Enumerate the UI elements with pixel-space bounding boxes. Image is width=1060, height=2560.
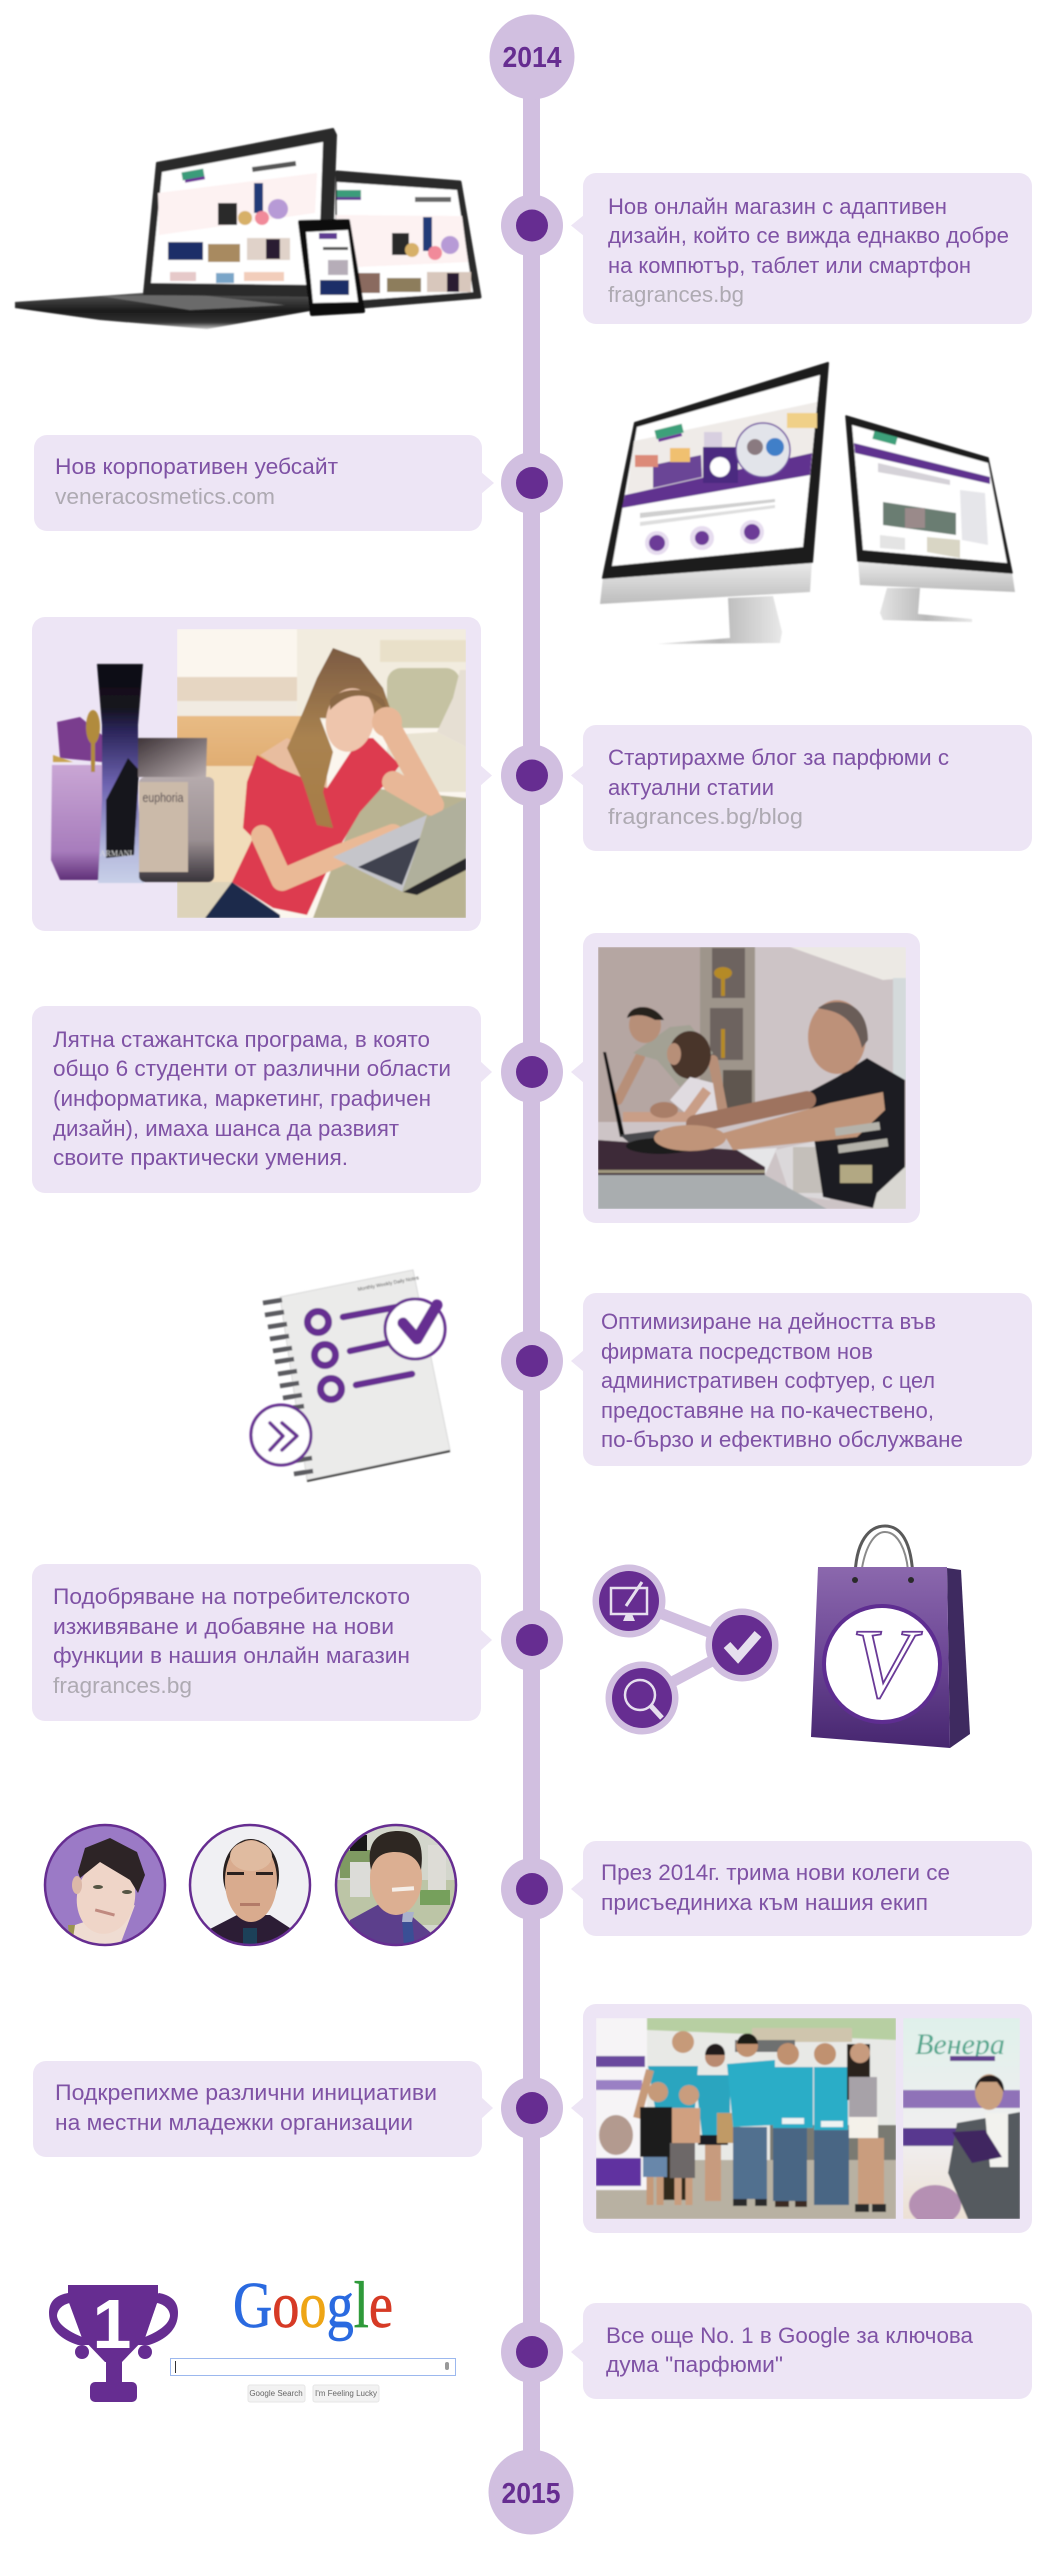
bubble: perfume blog: актуални статии: [608, 775, 774, 800]
year badge 2015: [488, 2450, 574, 2534]
photo: team in blue shirts: [596, 2018, 896, 2219]
bubble: admin software: административен софтуер, с цел: [601, 1368, 935, 1393]
portrait: third colleague: [336, 1825, 456, 1948]
year badge 2015: 2015: [502, 2478, 560, 2510]
bubble: perfume blog: [571, 725, 1032, 851]
panel: team and event photos: [571, 2004, 1032, 2233]
bubble: admin software: [571, 1293, 1032, 1466]
icon: connected feature circles: [592, 1564, 778, 1734]
timeline node 5: [501, 1330, 563, 1392]
icon: magnifier: [606, 1662, 678, 1734]
icon: notebook checklist: [251, 1270, 450, 1481]
bubble: new online shop: Нов онлайн магазин с адаптивен: [608, 194, 947, 219]
bubble: internship program: общо 6 студенти от различни области: [53, 1056, 451, 1081]
bubble: perfume blog: Стартирахме блог за парфюми с: [608, 745, 949, 770]
timeline node 8: [501, 2077, 563, 2139]
panel: woman with laptop and perfumes: [32, 617, 492, 931]
bubble: admin software: предоставяне на по-качествено,: [601, 1398, 934, 1423]
bubble: user experience: функции в нашия онлайн магазин: [53, 1643, 410, 1668]
year badge 2014: [490, 14, 574, 100]
bubble: internship program: своите практически умения.: [53, 1145, 348, 1170]
bubble: new online shop: дизайн, който се вижда еднакво добре: [608, 223, 1009, 248]
icon: monitor and pencil: [592, 1564, 666, 1638]
bubble: new colleagues: присъединиха към нашия екип: [601, 1890, 928, 1915]
bubble: youth initiatives: [33, 2061, 493, 2157]
Google search mockup: Google Search: [249, 2389, 303, 2398]
bubble: youth initiatives: на местни младежки организации: [55, 2110, 413, 2135]
bubble: new colleagues: [571, 1841, 1032, 1936]
Google search mockup: [170, 2269, 456, 2402]
bubble: admin software: Оптимизиране на дейността във: [601, 1309, 936, 1334]
timeline vertical line: [523, 57, 540, 2492]
bubble: corporate website: [34, 435, 494, 531]
timeline node 3: [501, 744, 563, 806]
Google search mockup: I'm Feeling Lucky: [315, 2389, 377, 2398]
bubble: new colleagues: През 2014г. трима нови колеги се: [601, 1860, 950, 1885]
panel: interns photo: [571, 933, 920, 1223]
photo: woman with laptop: [177, 629, 467, 918]
smartphone: [300, 221, 363, 314]
bubble: perfume blog: fragrances.bg/blog: [608, 804, 803, 829]
notebook spiral: [263, 1300, 313, 1474]
bubble: new online shop: на компютър, таблет или смартфон: [608, 253, 971, 278]
bubble: user experience: fragrances.bg: [53, 1673, 192, 1698]
timeline node 4: [501, 1041, 563, 1103]
icon: number one trophy: [49, 2285, 178, 2402]
icon: number one trophy: 1: [93, 2285, 131, 2363]
monitor right: [846, 416, 1015, 622]
tablet: [336, 172, 480, 307]
bubble: number one in Google: Все още No. 1 в Google за ключова: [606, 2323, 974, 2348]
year badge 2014: 2014: [502, 42, 562, 74]
perfume bottles: [51, 664, 214, 883]
bubble: new online shop: fragrances.bg: [608, 282, 744, 307]
bubble: youth initiatives: Подкрепихме различни инициативи: [55, 2080, 437, 2105]
monitor left: [600, 363, 828, 644]
icon: Venera shopping bag: [811, 1526, 970, 1748]
bubble: internship program: дизайн), имаха шанса да развият: [53, 1116, 399, 1141]
timeline node 1: [501, 194, 563, 256]
timeline node 2: [501, 452, 563, 514]
portrait: first colleague: [45, 1825, 165, 1945]
icon: Venera shopping bag: V: [851, 1608, 922, 1719]
timeline node 6: [501, 1609, 563, 1671]
Google logo: Google: [233, 2269, 393, 2342]
icon: notebook checklist: Monthly Weekly Daily Notes: [357, 1275, 420, 1293]
perfume bottles: ARMANI: [100, 849, 133, 858]
bubble: admin software: фирмата посредством нов: [601, 1339, 873, 1364]
timeline node 7: [501, 1858, 563, 1920]
photo: event banner with presenter: Венера: [915, 2028, 1005, 2061]
image: responsive devices: [15, 129, 480, 329]
bubble: admin software: по-бързо и ефективно обслужване: [601, 1427, 963, 1452]
bubble: internship program: [32, 1006, 492, 1193]
bubble: number one in Google: [571, 2303, 1032, 2399]
bubble: internship program: (информатика, маркетинг, графичен: [53, 1086, 431, 1111]
bubble: corporate website: veneracosmetics.com: [55, 484, 275, 509]
bubble: user experience: Подобряване на потребителското: [53, 1584, 410, 1609]
bubble: user experience: [32, 1564, 492, 1721]
bubble: internship program: Лятна стажантска програма, в която: [53, 1027, 430, 1052]
bubble: new online shop: [571, 173, 1032, 324]
portrait: second colleague: [190, 1825, 310, 1948]
timeline node 9: [501, 2321, 563, 2383]
icon: check mark: [706, 1608, 778, 1682]
photo: people at laptops: [598, 947, 906, 1209]
bubble: corporate website: Нов корпоративен уебсайт: [55, 454, 338, 479]
image: two desktop monitors: [600, 363, 1015, 644]
bubble: user experience: изживяване и добавяне на нови: [53, 1614, 394, 1639]
photo: event banner with presenter: [903, 2018, 1020, 2225]
laptop: [15, 129, 336, 329]
bubble: number one in Google: дума "парфюми": [606, 2352, 783, 2377]
perfume bottles: euphoria: [142, 790, 184, 805]
